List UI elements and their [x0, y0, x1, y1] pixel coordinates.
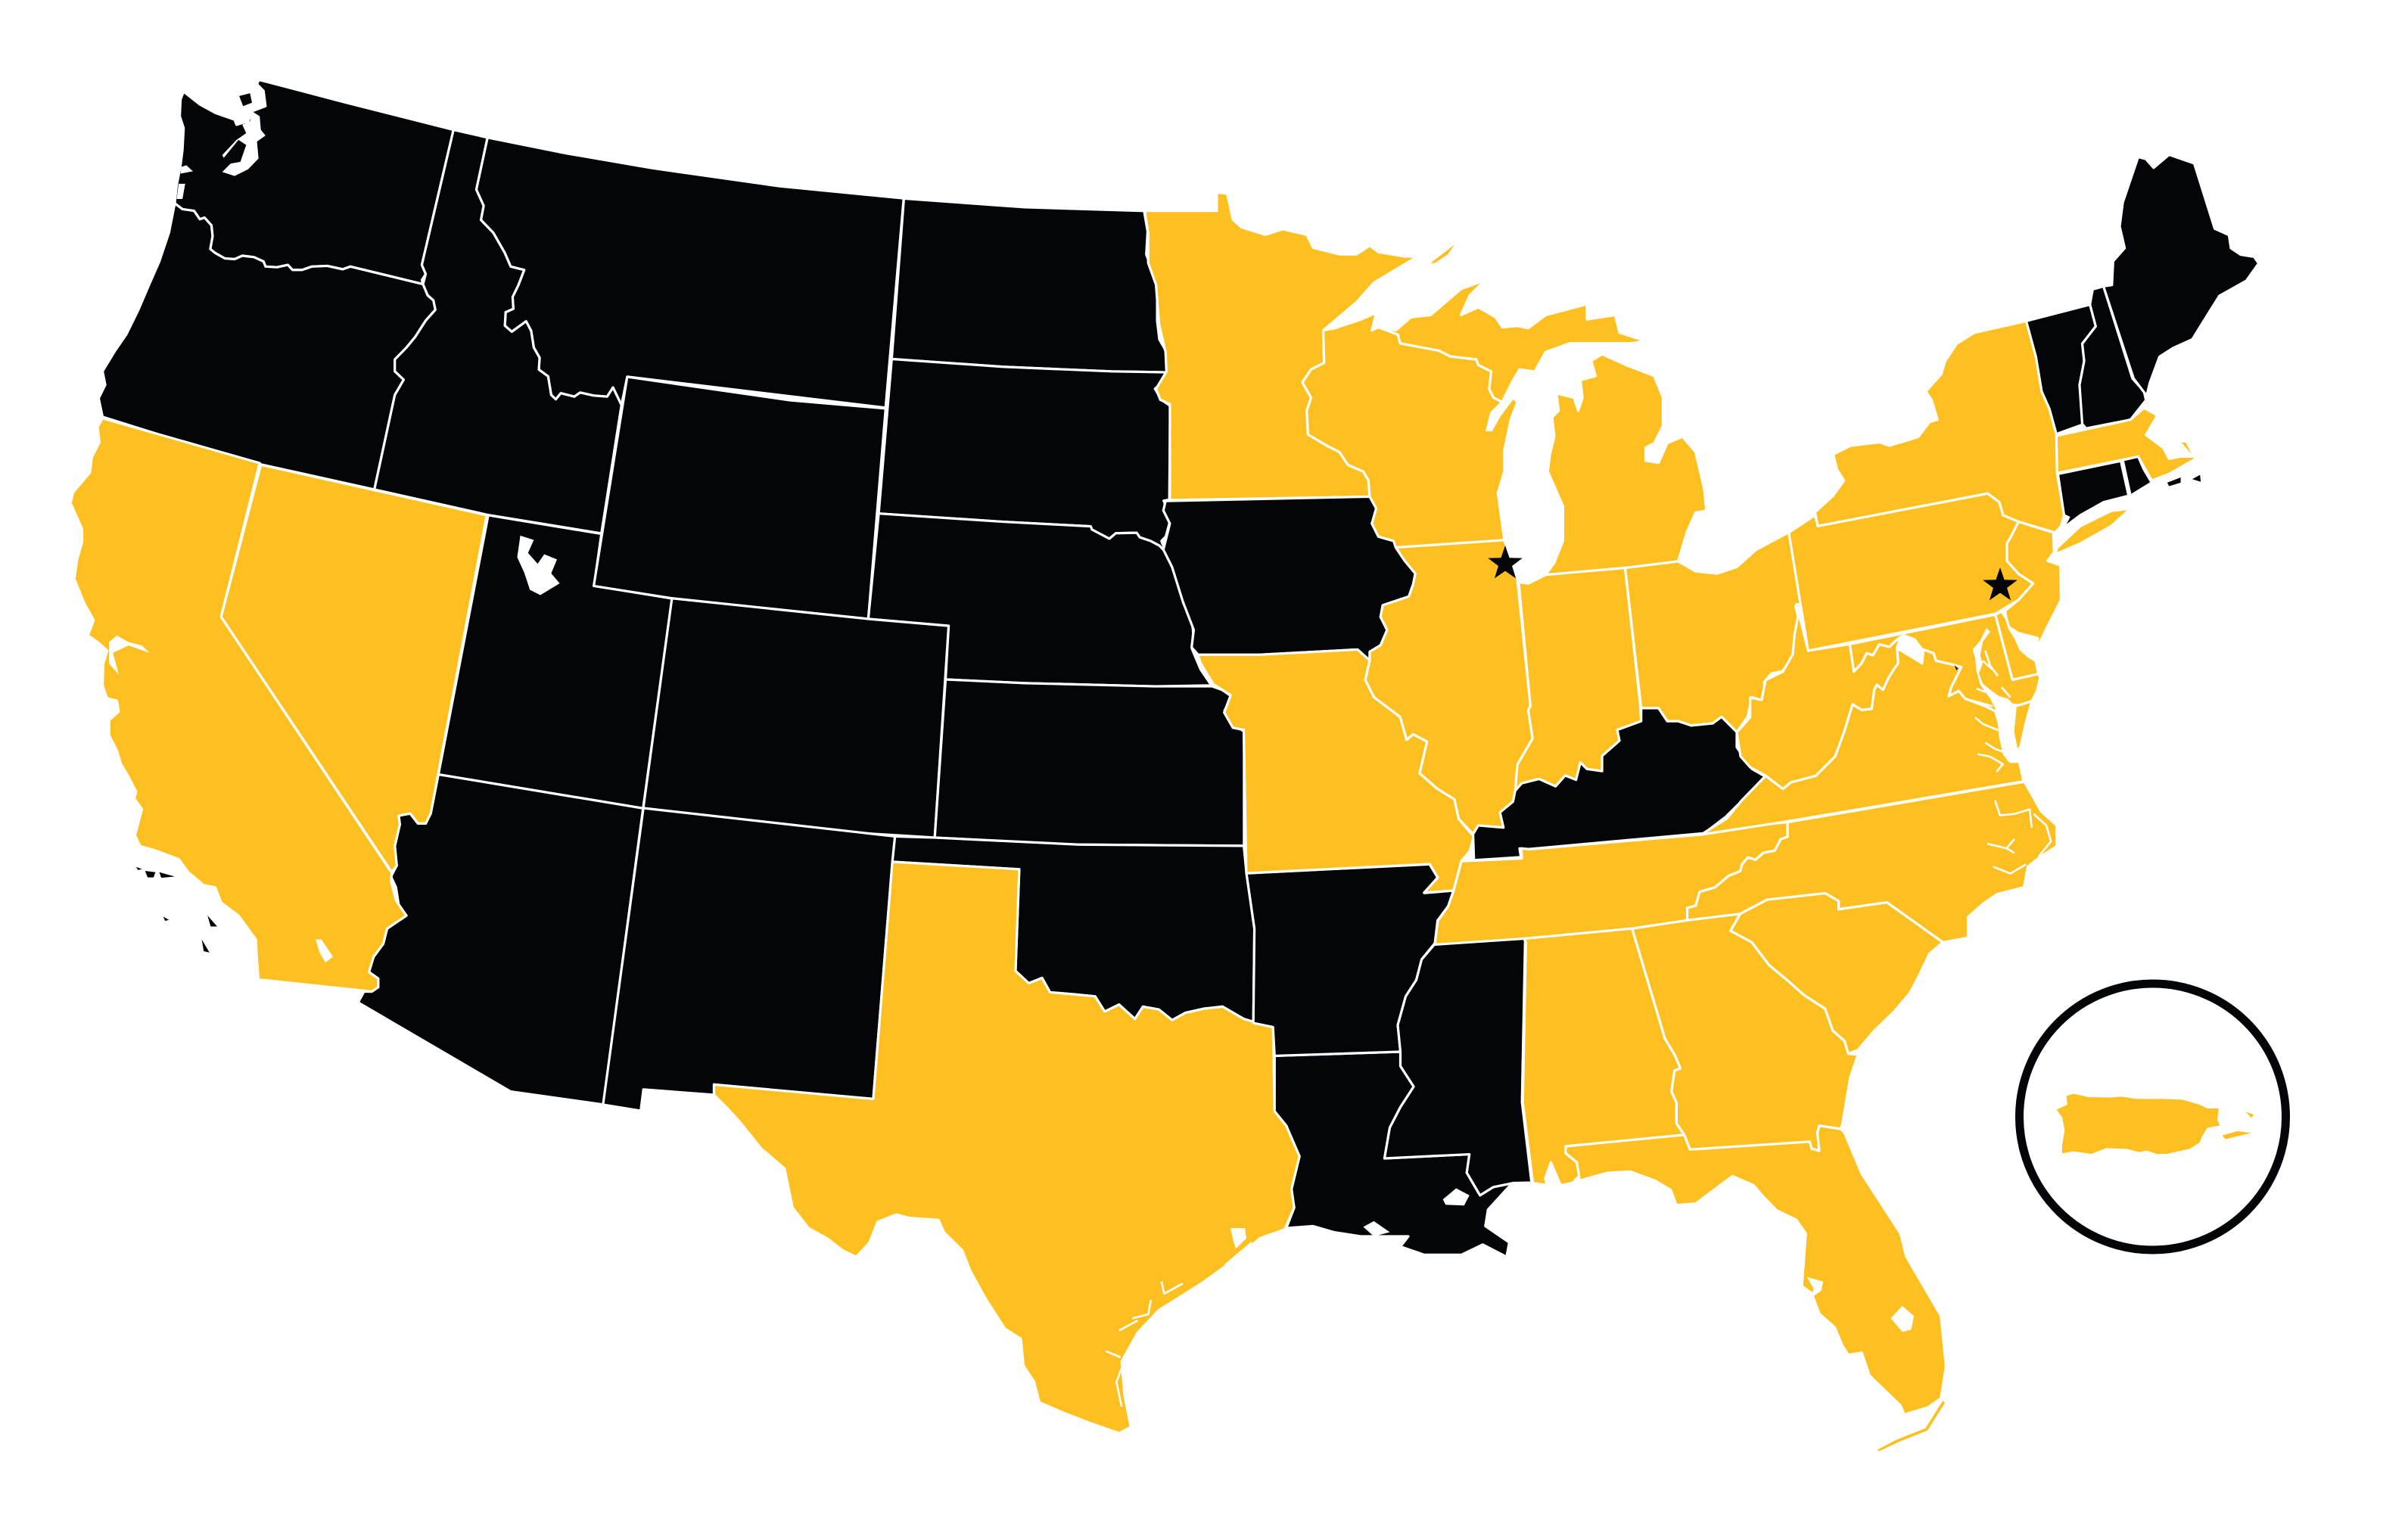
state: Maryland: [1850, 614, 2040, 711]
icon: Vieques and Culebra: [2223, 1112, 2254, 1139]
state: Arkansas: [1246, 864, 1454, 1056]
state: South Carolina: [1731, 894, 1943, 1054]
panel: Puerto Rico inset: [2019, 984, 2285, 1250]
icon: Carolina sounds: [1987, 801, 2051, 874]
state: Minnesota: [1145, 193, 1417, 500]
icon: Florida Keys: [1878, 1401, 1945, 1451]
state: Idaho: [375, 130, 621, 533]
state: Delaware: [1996, 611, 2038, 679]
state: Colorado: [643, 598, 949, 838]
state: Mississippi: [1384, 938, 1532, 1195]
panel: northwest states: [98, 79, 904, 533]
state: Maine: [2104, 155, 2259, 396]
state: Michigan lower peninsula: [1545, 354, 1706, 575]
state: Wisconsin: [1302, 313, 1517, 548]
panel: plains and mountain states: [594, 198, 1244, 846]
icon: Chesapeake Bay: [1973, 628, 2021, 762]
panel: northeast states: [1789, 155, 2259, 651]
state: Arizona: [358, 775, 643, 1105]
state: Rhode Island: [2123, 456, 2151, 496]
state: Puerto Rico main island: [2057, 1094, 2220, 1154]
icon: Washington DC: [1955, 665, 1958, 670]
state: Connecticut: [2058, 461, 2129, 528]
state: Illinois: [1365, 540, 1532, 834]
state: West Virginia: [1737, 605, 1901, 789]
panel: southwest states: [70, 418, 672, 1105]
state: New York, Long Island: [2055, 508, 2130, 555]
state: Utah: [438, 515, 672, 808]
panel: south central states: [603, 808, 1532, 1433]
inset circle: [2019, 984, 2285, 1250]
state: Texas: [714, 862, 1299, 1433]
icon: Pennsylvania star marker: [1983, 567, 2018, 600]
icon: Salton Sea: [316, 940, 333, 962]
state: Kansas: [935, 679, 1244, 846]
panel: mid-Atlantic states: [1701, 605, 2040, 835]
state: Nevada: [221, 465, 487, 872]
state: Georgia: [1632, 914, 1858, 1151]
icon: Puget Sound water: [222, 111, 266, 176]
state: Montana: [476, 138, 904, 408]
state: California: [70, 418, 406, 992]
state: Ohio: [1625, 532, 1801, 732]
Puerto Rico islands: [2057, 1094, 2254, 1154]
state: Kentucky: [1473, 708, 1765, 860]
icon: Galveston Bay: [1230, 1228, 1246, 1248]
icon: Illinois star marker: [1488, 546, 1523, 578]
icon: Great Salt Lake: [517, 536, 560, 595]
state: Pennsylvania: [1789, 493, 2033, 651]
state: Iowa: [1163, 496, 1415, 661]
icon: Lake Okeechobee: [1890, 1306, 1914, 1332]
state: Louisiana: [1274, 1052, 1514, 1257]
state: Missouri: [1198, 649, 1474, 893]
state: Indiana: [1515, 568, 1641, 791]
icon: Lake Pontchartrain: [1363, 1189, 1470, 1236]
state: Tennessee: [1435, 822, 1787, 944]
state: Oregon: [98, 204, 435, 490]
state: New Hampshire: [2080, 286, 2146, 428]
icon: Tampa Bay: [1807, 1277, 1823, 1298]
state: Oklahoma: [892, 836, 1255, 1023]
state: Michigan upper peninsula: [1378, 281, 1645, 402]
state: Nebraska: [868, 514, 1212, 686]
icon: Willapa Bay water: [176, 165, 193, 199]
icon: Isle Royale: [1430, 244, 1454, 263]
state: Florida: [1566, 1126, 1946, 1414]
state: Massachusetts: [2056, 408, 2195, 480]
state: Vermont: [2027, 305, 2095, 434]
state: South Dakota: [879, 359, 1170, 552]
state: North Carolina: [1688, 782, 2057, 942]
state: Virginia Eastern Shore: [2013, 701, 2032, 751]
icon: Texas coastal lagoons: [1106, 1242, 1252, 1407]
state: New Mexico: [603, 808, 895, 1111]
panel: midwest states: [1145, 193, 1801, 893]
state: New York: [1815, 321, 2064, 533]
icon: San Francisco Bay: [109, 636, 150, 675]
state: Alabama: [1523, 928, 1685, 1186]
icon: Nantucket and Martha's Vineyard: [2167, 475, 2201, 486]
icon: Chesapeake tributaries: [1965, 651, 2011, 772]
state: Virginia: [1701, 648, 2024, 835]
icon: San Juan Islands: [239, 93, 252, 106]
panel: southeast states: [1435, 782, 2057, 1451]
state: New Jersey: [2005, 522, 2061, 648]
state: Washington: [175, 79, 453, 284]
state: North Dakota: [891, 198, 1167, 372]
icon: Channel Islands: [136, 867, 217, 953]
state: Wyoming: [594, 377, 885, 619]
